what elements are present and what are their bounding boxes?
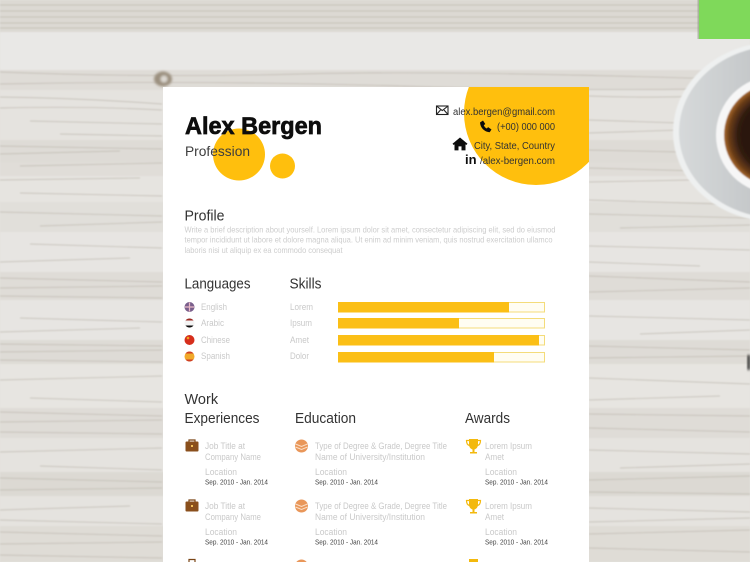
skill: Dolor: Dolor [290, 351, 309, 361]
skill: Amet: Amet [290, 335, 310, 345]
icon: trophy [466, 499, 480, 514]
profile heading: Profile [184, 208, 224, 224]
work entry 1 [186, 440, 268, 486]
work entry 1: Sep. 2010 - Jan. 2014 [205, 478, 268, 486]
Spanish: Spanish [201, 351, 230, 361]
profile section: laboris nisi ut aliquip ex ea commodo consequat [184, 246, 343, 255]
flag: China [184, 335, 194, 345]
name heading: Alex Bergen [185, 113, 322, 140]
award entry 1: Sep. 2010 - Jan. 2014 [485, 478, 548, 486]
icon: books row 3 [295, 560, 308, 562]
Arabic: Arabic [201, 318, 225, 328]
education section [295, 411, 447, 562]
award entry 2: Location [485, 527, 517, 537]
profile section [184, 208, 556, 255]
work entry 2 [186, 500, 268, 546]
icon: envelope [436, 106, 448, 114]
wood knot [154, 72, 172, 86]
skill: Lorem: Lorem [290, 302, 313, 312]
flag: Arabic [184, 318, 194, 328]
work entry 1: Company Name [205, 452, 261, 462]
award entry 1: Amet [485, 452, 505, 462]
icon: books [295, 440, 308, 452]
work entry 2: Company Name [205, 512, 261, 522]
work heading: Work [184, 392, 219, 408]
icon: phone [480, 120, 491, 132]
sticky note [698, 0, 750, 39]
linkedin handle: /alex-bergen.com [480, 156, 555, 167]
education entry 1: Name of University/Institution [315, 452, 425, 462]
English: English [201, 302, 227, 312]
flag: Spain [184, 352, 194, 362]
education entry 1: Location [315, 467, 347, 477]
award entry 1: Lorem Ipsum [485, 441, 532, 451]
skill: Lorem [290, 302, 544, 312]
award entry 2: Sep. 2010 - Jan. 2014 [485, 538, 548, 546]
yellow decorative circles [213, 87, 589, 185]
languages heading: Languages [184, 276, 250, 292]
award entry 2: Amet [485, 512, 505, 522]
award entry 1 [466, 439, 548, 486]
education entry 1 [295, 440, 447, 486]
address: City, State, Country [474, 141, 555, 152]
education entry 1: Sep. 2010 - Jan. 2014 [315, 478, 378, 486]
skill: Amet [290, 335, 544, 346]
coffee cup and saucer [673, 42, 750, 222]
icon: linkedin: in [465, 152, 477, 167]
work entry 2: Sep. 2010 - Jan. 2014 [205, 538, 268, 546]
awards heading: Awards [465, 411, 510, 427]
skill: Dolor [290, 351, 544, 362]
work experiences section: Experiences [184, 411, 260, 427]
education entry 2: Name of University/Institution [315, 512, 425, 522]
education entry 2: Type of Degree & Grade, Degree Title [315, 501, 447, 511]
education entry 2: Location [315, 527, 347, 537]
education entry 2: Sep. 2010 - Jan. 2014 [315, 538, 378, 546]
award entry 2: Lorem Ipsum [485, 501, 532, 511]
work entry 2: Job Title at [205, 501, 246, 511]
skills section [290, 276, 544, 362]
languages section [184, 276, 250, 362]
pen tip [748, 355, 750, 370]
icon: briefcase [186, 500, 198, 512]
skills heading: Skills [290, 276, 322, 292]
email: alex.bergen@gmail.com [453, 107, 555, 118]
profession: Profession [185, 143, 250, 159]
work experiences section [184, 392, 268, 562]
Chinese: Chinese [201, 335, 230, 345]
icon: briefcase row 3 [189, 560, 195, 562]
contact block [436, 106, 555, 167]
work entry 1: Location [205, 467, 237, 477]
icon: house [452, 138, 468, 150]
work entry 2: Location [205, 527, 237, 537]
education entry 2 [295, 500, 447, 546]
resume sheet [163, 87, 589, 562]
profile section: tempor incididunt ut labore et dolore magna aliqua. Ut enim ad minim veniam, quis nostrud exercitation ullamco [184, 236, 553, 244]
flag: UK [184, 302, 194, 312]
icon: trophy [466, 439, 480, 454]
award entry 1: Location [485, 467, 517, 477]
awards section [465, 411, 548, 562]
award entry 2 [466, 499, 548, 546]
skill: Ipsum: Ipsum [290, 318, 312, 328]
phone number: (+00) 000 000 [497, 122, 555, 133]
education entry 1: Type of Degree & Grade, Degree Title [315, 441, 447, 451]
skill: Ipsum [290, 318, 544, 328]
work entry 1: Job Title at [205, 441, 246, 451]
education heading: Education [295, 411, 356, 427]
icon: trophy row 3 [469, 559, 478, 562]
icon: books [295, 500, 308, 512]
icon: briefcase [186, 440, 198, 452]
profile text: Write a brief description about yourself. Lorem ipsum dolor sit amet, consectetur adipiscing elit, sed do eiusmod [184, 226, 556, 234]
